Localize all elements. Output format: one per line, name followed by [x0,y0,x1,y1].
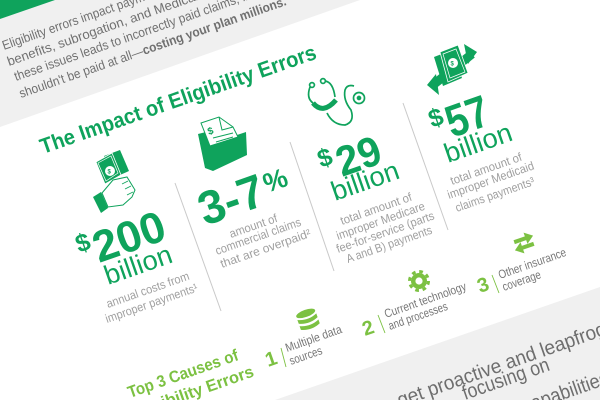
description: total amount of [448,150,524,188]
description: commercial claims [213,215,303,258]
cause 3: other insurance coverage: Other insurance [496,245,568,282]
big number: 29 [329,126,387,185]
description: improper payments¹ [103,281,200,326]
description: improper Medicare [334,199,427,243]
cause 1: multiple data sources: Multiple data [283,322,344,355]
description [334,190,436,266]
panel: stat 57 billion [425,44,536,215]
cause 2: current technology: 2 [359,316,377,341]
icon: gear [410,272,428,290]
icon: stethoscope [309,79,364,125]
icon: hand holding cash [93,150,135,213]
panel: bottom call to action [275,287,600,400]
big number: $ [314,143,336,174]
cause 1: multiple data sources [262,307,344,372]
big number: billion [100,239,176,291]
cause 2: current technology: and processes [386,299,450,333]
big number: $ [425,103,447,134]
big number: billion [440,117,516,169]
description [445,150,536,215]
description: amount of [227,211,280,241]
big number: $ [72,228,94,259]
icon: hand holding cash: $ [108,170,112,176]
icon: cash with two-way arrows: $ [450,62,454,68]
description: A and B) payments [344,223,434,266]
top green bar [0,0,55,19]
icon: folder with invoice: $ [206,126,215,138]
icon: folder with invoice [198,117,247,171]
description: improper Medicaid [445,159,536,202]
big number [72,202,176,291]
description: total amount of [338,190,414,228]
big number: billion [327,155,403,207]
description: fee-for-service (parts [334,209,436,256]
description: claims payments³ [453,174,536,215]
big number: 57 [438,85,496,147]
panel: stat 29 billion [309,79,436,266]
description: that are overpaid² [218,226,313,271]
panel: stat 200 billion [72,150,200,326]
cause 3: other insurance coverage: 3 [474,273,492,298]
big number: 200 [86,202,172,272]
big number: 3-7 [191,163,272,235]
heading: The Impact of Eligibility Errors: The Impact of Eligibility Errors [37,40,319,159]
icon: database [295,307,320,332]
cause 2: current technology [359,272,468,341]
panel: intro band [0,0,360,127]
big number: % [259,162,292,199]
cause 2: current technology: Current technology [382,279,468,321]
icon: swap arrows [510,230,538,256]
big number [314,126,403,207]
cause 3: other insurance coverage [474,230,568,298]
cause 1: multiple data sources: sources [287,343,324,368]
icon: cash with two-way arrows [427,44,477,95]
cause 3: other insurance coverage: coverage [500,267,543,294]
big number [425,85,516,169]
cause 1: multiple data sources: 1 [262,347,280,372]
panel: stat 3-7% [191,117,313,271]
description: annual costs from [104,269,191,311]
